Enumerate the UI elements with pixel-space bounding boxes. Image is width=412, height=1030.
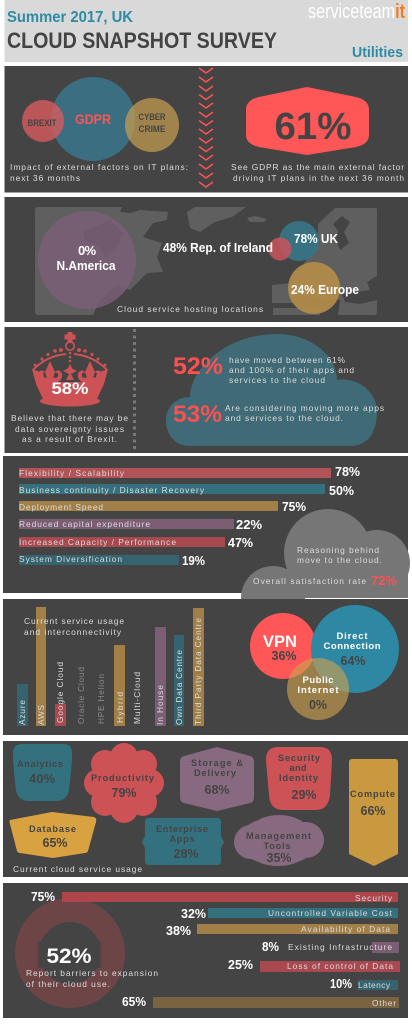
chevron divider [199,68,213,187]
bar chart: current service usage: Azure [17,700,27,725]
bar: Security: Security [355,893,393,903]
venn: external factors: GDPR [75,112,111,127]
venn: external factors: CRIME [138,124,166,134]
bar: Security: 75% [31,889,55,904]
bar: Other [122,994,399,1009]
badge: Security and Identity: and [290,763,306,773]
grey cloud [241,509,410,630]
bubble: N. America [38,211,136,309]
bar: Availability of Data: 38% [166,923,191,938]
badge: Security and Identity [266,747,332,810]
bar: Existing Infrastructure [262,939,399,954]
bar: Flexibility: 78% [335,464,360,479]
badge: Enterprise Apps [142,818,224,865]
bar: Existing Infrastructure: Existing Infrastructure [288,942,392,952]
caption: GDPR main factor: driving IT plans in the next 36 month [233,173,404,183]
badge: Database [10,812,96,858]
bar: Flexibility: Flexibility / Scalability [19,468,125,478]
stat: 52% moved: have moved between 61% [229,355,346,365]
bar: Business continuity: 50% [329,483,354,498]
bar chart: current service usage: In House [155,685,165,725]
stat: 53% considering: 53% [173,401,222,428]
caption: barriers: of their cloud use. [26,979,110,989]
bar: Flexibility [19,464,360,479]
bubble: Ireland: 48% Rep. of Ireland [163,240,273,255]
panel: cloud service usage [3,741,408,877]
bubble: Europe [288,262,359,314]
bar chart: current service usage: Multi-Cloud [132,672,142,724]
badge: Analytics: Analytics [17,759,63,769]
venn: external factors: BREXIT [28,118,57,128]
caption: service usage: and interconnectivity [24,627,122,637]
badge: Productivity: Productivity [91,773,155,783]
badge: Compute [349,759,398,866]
venn: connectivity [250,605,399,720]
badge: Management Tools: Management [246,831,311,841]
bar chart: current service usage: Hybrid [115,692,125,723]
caption: cloud service usage: Current cloud service usage [13,864,142,874]
badge: Analytics: 40% [29,771,55,786]
cloud backdrop [166,334,377,446]
panel: service usage and interconnectivity [3,599,408,735]
badge: Storage and Delivery: Storage & [191,758,243,768]
badge: Security and Identity: Security [278,753,321,763]
stat: overall satisfaction [253,574,397,588]
bar: Reduced capex: 22% [236,517,262,532]
subtitle: Summer 2017, UK: Summer 2017, UK [7,9,134,26]
badge: Enterprise Apps: Apps [170,834,194,844]
venn: external factors [22,77,179,161]
bubble: N. America: N.America [56,258,116,273]
caption: sovereignty issues [11,413,128,444]
bar: Uncontrolled Variable Cost [181,906,398,921]
bar chart: current service usage: Own Data Centre [174,650,184,725]
stat: 53% considering: and services to the cloud. [225,413,343,423]
badge: Security and Identity: Identity [279,773,319,783]
donut: 52% [27,910,113,996]
bar chart: current service usage: HPE Helion [96,674,106,724]
stat: 53% considering [173,401,384,428]
stat: 53% considering: Are considering moving more apps [225,403,384,413]
donut: 52%: 52% [46,945,92,968]
bar: Latency: Latency [358,980,391,990]
caption: reasoning: Reasoning behind [297,545,379,555]
venn: connectivity: Direct [336,631,368,642]
bar chart: current service usage [17,607,204,726]
icon: crown [32,332,108,406]
badge: Management Tools: Tools [264,841,290,851]
caption: service usage [24,616,124,637]
bar chart: current service usage: Google Cloud [55,662,65,723]
dotted divider [133,329,136,450]
caption: GDPR main factor: See GDPR as the main external factor [231,162,404,172]
caption: impact of external factors: Impact of external factors on IT plans: [10,162,188,172]
stat: 52% moved: 52% [173,353,223,380]
bar: System Diversification: 19% [182,553,205,568]
badge: Compute: Compute [350,789,395,799]
bar: Other: 65% [122,994,146,1009]
badge: Management Tools [234,815,324,866]
bubble: UK: 78% UK [294,231,339,246]
caption: barriers [26,968,158,989]
bar: System Diversification [19,553,205,568]
stat: 52% moved: and 100% of their apps and [229,365,354,375]
bubble: Ireland [163,238,292,260]
bubble: Europe: 24% Europe [291,282,359,297]
caption: sovereignty issues: data sovereignty issues [15,424,124,434]
panel: sovereignty and moves [4,327,408,453]
venn: external factors: CYBER [138,112,166,122]
icon: crown: 58% [52,379,88,398]
bar: Uncontrolled Variable Cost: 32% [181,906,206,921]
badge: Storage and Delivery [180,747,254,811]
bubble: UK [279,221,339,261]
bar chart: current service usage: Oracle Cloud [76,667,86,724]
venn: connectivity: Internet [298,685,339,696]
badge: Enterprise Apps: Enterprise [156,824,208,834]
header panel [4,0,408,62]
bar chart: current service usage: Third Party Data Centre [193,618,203,725]
venn: connectivity: 36% [272,648,297,663]
bar: Reduced capex [19,517,262,532]
bar: Security [31,889,398,904]
caption: reasoning [297,545,382,565]
bar: Existing Infrastructure: 8% [262,939,279,954]
panel: barriers [3,883,408,1018]
bar: Uncontrolled Variable Cost: Uncontrolled Variable Cost [268,908,393,918]
venn: connectivity: Connection [324,641,381,652]
bar: Loss of control of Data [228,957,400,972]
bar: Availability of Data: Availability of Data [301,924,390,934]
bar: Loss of control of Data: 25% [228,957,253,972]
caption: hosting locations: Cloud service hosting locations [117,304,263,314]
panel: reasoning behind move [3,456,410,630]
bar: Latency [330,976,398,991]
stat: overall satisfaction: Overall satisfaction rate [253,576,366,586]
stat: overall satisfaction: 72% [371,574,397,588]
bar: Deployment Speed [19,499,306,514]
bar: Deployment Speed: 75% [282,499,306,514]
caption: sovereignty issues: as a result of Brexit. [22,434,117,444]
venn: connectivity: 64% [340,653,366,668]
panel: external factors [4,66,408,192]
badge: Enterprise Apps: 28% [174,846,199,861]
badge: 61%: 61% [274,106,352,148]
bar: Increased capacity: 47% [228,535,253,550]
panel: hosting locations [4,197,408,322]
badge: Database: Database [29,824,76,834]
badge: 61% [246,87,369,155]
bar: Loss of control of Data: Loss of control of Data [287,961,393,971]
bar: Increased capacity [19,535,253,550]
badge: Storage and Delivery: 68% [204,782,230,797]
stat: 52% moved [173,353,354,385]
bar: Deployment Speed: Deployment Speed [19,502,103,512]
caption: impact of external factors [10,162,188,183]
bar: Availability of Data [166,923,398,938]
world map [35,207,377,315]
bar: Other: Other [372,998,396,1008]
caption: GDPR main factor [231,162,404,183]
badge: Compute: 66% [360,803,386,818]
caption: impact of external factors: next 36 months [10,173,80,183]
sector label: Utilities: Utilities [352,45,403,61]
badge: Analytics [13,744,72,801]
badge: Management Tools: 35% [266,850,292,865]
bar: System Diversification: System Diversification [19,554,122,564]
venn: connectivity: 0% [309,697,327,712]
bar chart: current service usage: AWS [36,705,46,725]
badge: Storage and Delivery: Delivery [194,768,237,778]
badge: Database: 65% [42,835,68,850]
caption: sovereignty issues: Believe that there may be [11,413,128,423]
bar: Reduced capex: Reduced capital expenditure [19,519,150,529]
badge: Productivity [84,743,164,823]
venn: connectivity: VPN [263,633,297,651]
bar: Latency: 10% [330,976,352,991]
badge: Productivity: 79% [112,785,137,800]
stat: 52% moved: services to the cloud [229,375,325,385]
caption: service usage: Current service usage [24,616,124,626]
title: CLOUD SNAPSHOT SURVEY [7,28,277,53]
bar: Business continuity: Business continuity / Disaster Recovery [19,485,205,495]
venn: connectivity: Public [302,675,334,686]
caption: reasoning: move to the cloud. [297,555,382,565]
bar: Business continuity [19,483,354,498]
bubble: N. America: 0% [78,243,96,258]
caption: barriers: Report barriers to expansion [26,968,158,978]
bar: Increased capacity: Increased Capacity / Performance [19,537,176,547]
badge: Security and Identity: 29% [292,787,317,802]
